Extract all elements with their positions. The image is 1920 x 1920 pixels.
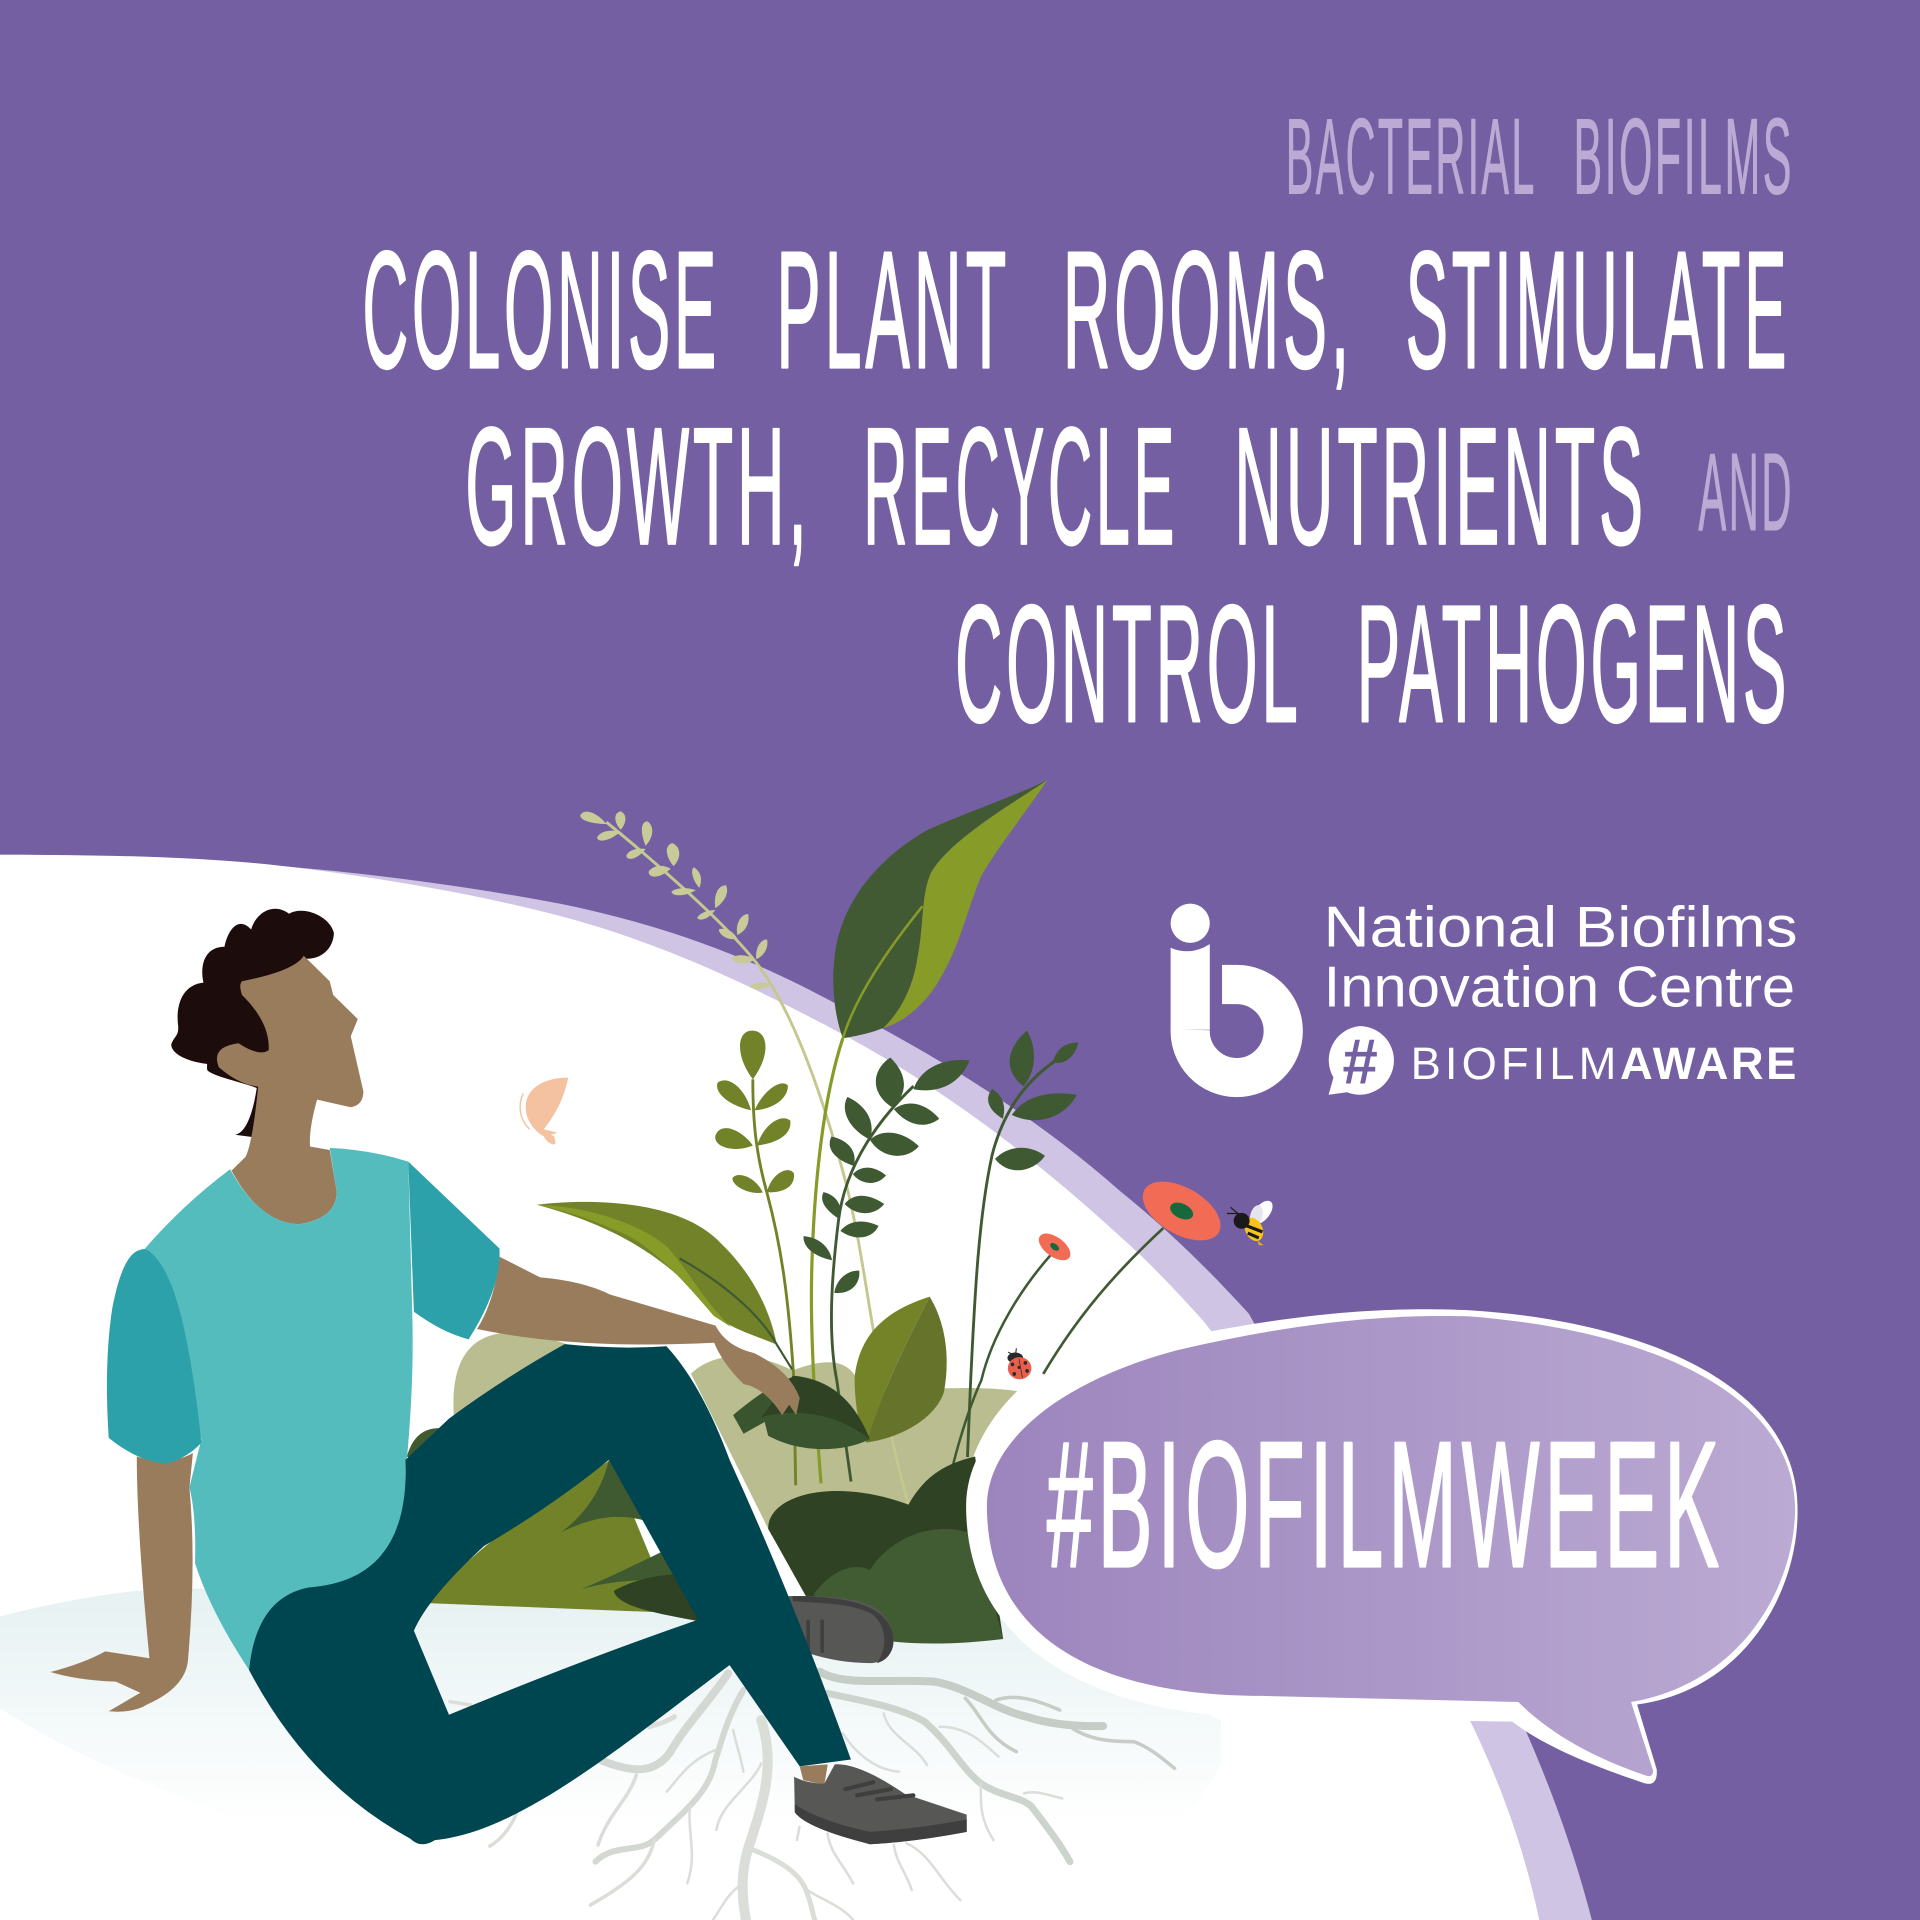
floor shadow [0, 1588, 1221, 1861]
headline line 1 [362, 217, 1790, 403]
round leaf [855, 1297, 947, 1442]
white ground area [0, 855, 1539, 1920]
butterfly [520, 1078, 568, 1144]
headline line 2 [465, 394, 1794, 580]
back shoe [779, 1596, 894, 1663]
bee [1227, 1197, 1277, 1245]
ankle [800, 1764, 828, 1785]
biofilmaware badge [1329, 1026, 1796, 1098]
olive ground leaf [428, 1460, 673, 1613]
big red flower [1043, 1169, 1230, 1374]
dark leaf tips [407, 1428, 691, 1589]
headline line 2: GROWTH, [465, 394, 811, 580]
person seated [51, 909, 967, 1844]
bubble white outline [966, 1309, 1798, 1784]
biofilmaware badge: BIOFILM [1411, 1038, 1616, 1089]
pale shrubs [453, 1332, 1017, 1536]
left sleeve [107, 1249, 201, 1463]
left arm [51, 1453, 193, 1712]
tall green stem [811, 1038, 843, 1483]
headline line 1: ROOMS, [1063, 217, 1353, 403]
organisation name: Innovation Centre [1324, 956, 1795, 1020]
logo mark [1171, 904, 1283, 1078]
hair [171, 909, 334, 1138]
headline line 3: CONTROL [955, 571, 1302, 757]
ladybird [1007, 1348, 1031, 1379]
dark foreground shrubs [614, 1376, 1003, 1644]
headline line 2: RECYCLE [863, 394, 1178, 580]
speech bubble: #BIOFILMWEEK [966, 1309, 1798, 1784]
biofilmaware badge: AWARE [1620, 1038, 1796, 1089]
small flower [943, 1228, 1075, 1517]
headline line 1: PLANT [776, 217, 1010, 403]
background shrubs and low leaves [407, 1332, 1017, 1613]
dark fern [803, 1057, 970, 1481]
trousers [249, 1344, 851, 1844]
organisation name [1324, 896, 1798, 1020]
t-shirt [144, 1148, 413, 1670]
right arm and hand [477, 1257, 800, 1415]
bubble fill [987, 1316, 1795, 1776]
olive fern [715, 1031, 796, 1485]
right sleeve [408, 1162, 500, 1339]
headline line 1: COLONISE [362, 217, 720, 403]
plant roots [450, 1672, 1175, 1920]
right dark fern [967, 1031, 1079, 1457]
headline [362, 95, 1794, 757]
big leaf top [833, 780, 1047, 1038]
left big leaf [537, 1202, 792, 1369]
head and neck [217, 956, 363, 1224]
biofilmaware badge: # [1341, 1027, 1377, 1098]
lilac curved band [0, 855, 1592, 1920]
organisation name: National Biofilms [1324, 896, 1798, 960]
pale sprig [580, 811, 909, 1504]
front shoe [794, 1764, 967, 1844]
kicker: bacterial biofilms: BACTERIAL [1286, 95, 1537, 216]
plants: stems and leaves [537, 780, 1079, 1517]
